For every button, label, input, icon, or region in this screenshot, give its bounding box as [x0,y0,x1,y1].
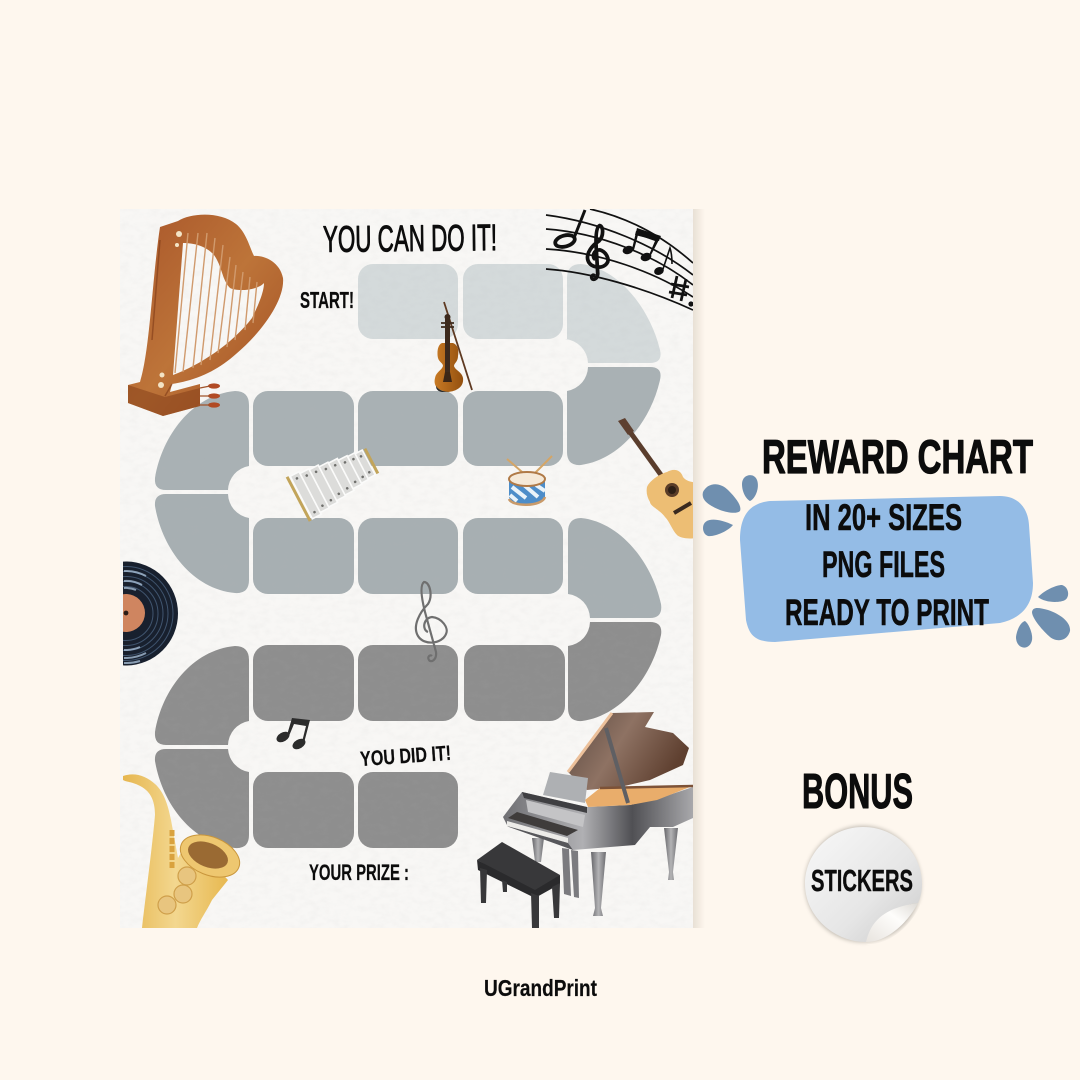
sticker text: STICKERS [811,863,913,898]
row 4 steps [155,622,661,745]
piano body [503,787,693,850]
piano back leg [664,828,678,880]
piano pedals [562,848,579,898]
row 3 steps [155,494,661,618]
icon: drum [507,456,552,505]
callout: file details [740,496,1033,642]
treble clef [586,224,610,282]
label: start: START! [300,287,354,313]
panel: reward chart sheet [74,209,705,928]
decorative droplets top left [703,475,758,536]
icon: guitar [618,418,700,538]
icon: xylophone [287,439,383,521]
row 1 steps [358,264,661,363]
line: png files: PNG FILES [822,544,945,585]
keyboard [508,812,578,836]
piano bench [477,842,560,928]
sticker background under curl [866,903,928,950]
sharp sign [669,276,689,301]
music desk [543,772,588,803]
line: in 20+ sizes: IN 20+ SIZES [805,497,962,538]
row 2 steps [155,367,661,490]
brand name: UGrandPrint [484,975,597,1001]
icon: music staff with notes [546,209,694,310]
row 5 steps [155,749,458,848]
sticker shadow [805,826,921,942]
heading: you can do it: YOU CAN DO IT! [323,217,497,260]
eighth note [554,210,585,249]
icon: double music note [275,718,310,751]
piano rim [522,792,587,813]
label: your prize: YOUR PRIZE : [309,860,409,885]
icon: saxophone [123,774,246,928]
sticker curl [866,903,918,942]
lid prop [606,728,628,803]
piano front panel [526,800,585,827]
sticker badge [805,826,928,950]
icon: treble clef outline [416,582,447,661]
icon: violin with bow [435,302,472,392]
icon: harp [128,215,283,416]
piano lid [568,712,689,790]
single note [653,248,672,276]
paper texture [120,209,693,928]
piano front leg [591,852,606,916]
beamed notes [621,228,661,263]
piano left leg [532,838,544,862]
piano soundboard [585,787,690,807]
heading: bonus: BONUS [802,765,913,819]
label: you did it: YOU DID IT! [359,742,452,771]
decorative droplets bottom right [1016,585,1070,648]
game board path [155,264,661,848]
icon: grand piano with bench [477,712,693,928]
icon: vinyl record [123,562,178,666]
